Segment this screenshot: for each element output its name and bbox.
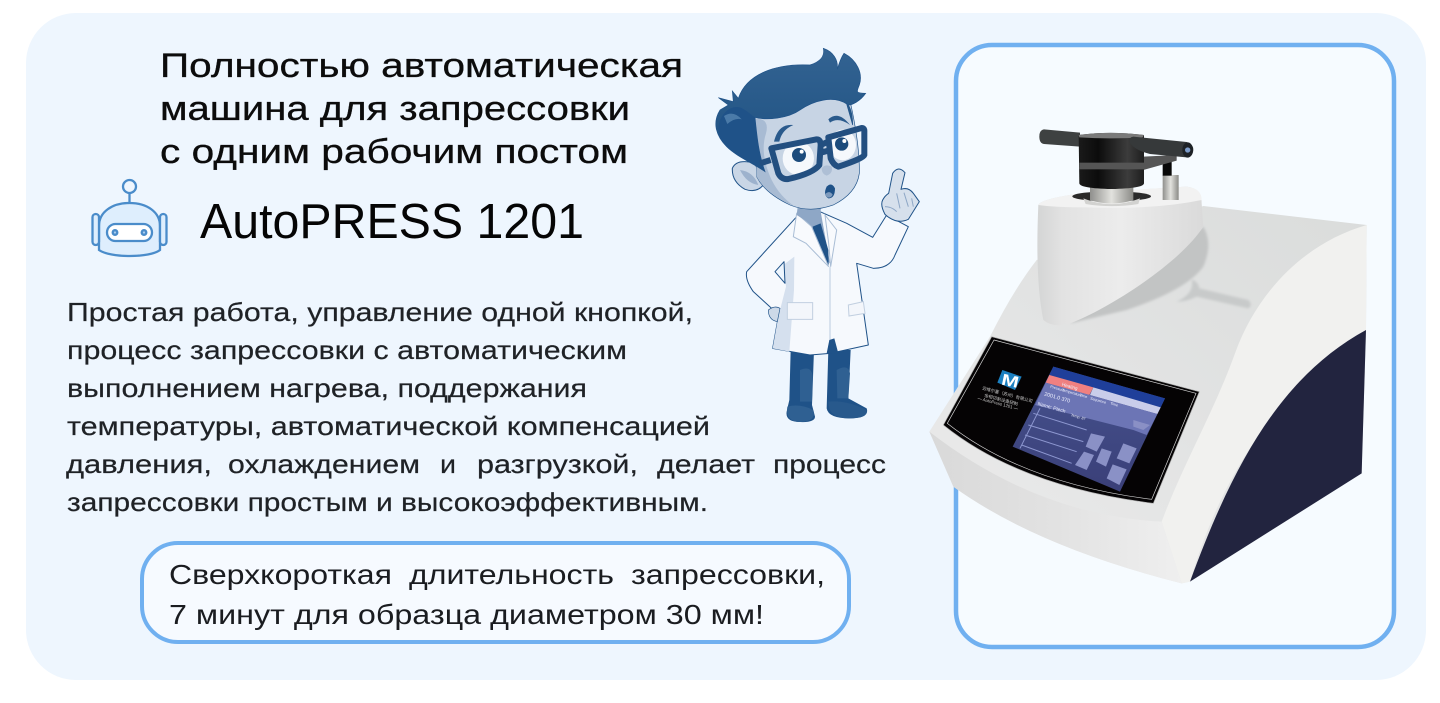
logo xyxy=(997,370,1022,390)
rear post xyxy=(1163,175,1179,200)
callout: 7 минут для образца диаметром 30 мм! xyxy=(169,599,764,630)
title: машина для запрессовки xyxy=(160,90,630,128)
press machine xyxy=(929,129,1367,583)
eyes xyxy=(783,142,814,175)
touch screen: Heating xyxy=(1061,382,1079,391)
callout: длительность xyxy=(409,559,614,590)
right handle xyxy=(1129,137,1193,157)
lab coat xyxy=(746,212,908,355)
eyebrows xyxy=(774,125,793,142)
scientist character xyxy=(716,48,919,422)
glasses xyxy=(760,128,864,179)
panel caption: 金相切割设备研制 xyxy=(983,392,1019,408)
callout: Сверхкороткая xyxy=(169,559,392,590)
product name: AutoPRESS 1201 xyxy=(200,195,584,249)
touch screen: Pressure xyxy=(1050,385,1065,393)
navy side panel xyxy=(1190,330,1366,582)
description text: температуры, автоматической компенсацией xyxy=(67,411,710,441)
touch screen xyxy=(1013,367,1165,492)
description text: и xyxy=(440,449,456,479)
touch screen: Time xyxy=(1110,401,1119,407)
panel caption xyxy=(977,385,1033,411)
description text: Простая работа, управление одной кнопкой, xyxy=(67,297,693,327)
touch screen: Temperature xyxy=(1061,388,1082,398)
left handle xyxy=(1039,129,1080,147)
callout: запрессовки, xyxy=(631,559,825,590)
description text xyxy=(66,297,886,517)
description text: запрессовки простым и высокоэффективным. xyxy=(67,487,708,517)
description text: процесс запрессовки с автоматическим xyxy=(67,335,627,365)
head xyxy=(716,48,866,223)
touch screen: Sequence xyxy=(1090,396,1107,405)
machine frame xyxy=(956,45,1394,647)
title: с одним рабочим постом xyxy=(160,133,628,171)
title xyxy=(160,47,683,171)
side swoosh xyxy=(1162,225,1367,583)
front lower face xyxy=(929,432,1182,583)
machine body xyxy=(929,206,1367,583)
hair xyxy=(716,48,866,172)
press cap xyxy=(1079,133,1144,189)
title: Полностью автоматическая xyxy=(160,47,683,85)
panel caption: 迈维尔富（苏州）有限公司 xyxy=(981,385,1033,405)
description text: охлаждением xyxy=(228,449,420,479)
hand pointing up xyxy=(882,169,919,221)
description text: процесс xyxy=(773,449,886,479)
touch screen: Temp: 87 xyxy=(1070,413,1086,421)
touch screen: Time xyxy=(1079,393,1088,399)
callout xyxy=(142,543,849,642)
description text: делает xyxy=(657,449,755,479)
description text: выполнением нагрева, поддержания xyxy=(67,373,587,403)
description text: разгрузкой, xyxy=(477,449,638,479)
panel caption: — AutoPress 1201 — xyxy=(977,395,1019,411)
legs and shoes xyxy=(786,350,867,422)
piston column xyxy=(1090,187,1133,204)
touch screen: 2001.0 370 xyxy=(1043,391,1071,405)
press head xyxy=(1037,187,1203,325)
display panel: M xyxy=(1000,372,1020,392)
touch screen: Name: Ptech xyxy=(1037,401,1066,415)
icon: robot xyxy=(92,180,166,256)
display panel xyxy=(943,337,1199,503)
head shadow xyxy=(1070,227,1208,323)
description text: давления, xyxy=(66,449,212,479)
